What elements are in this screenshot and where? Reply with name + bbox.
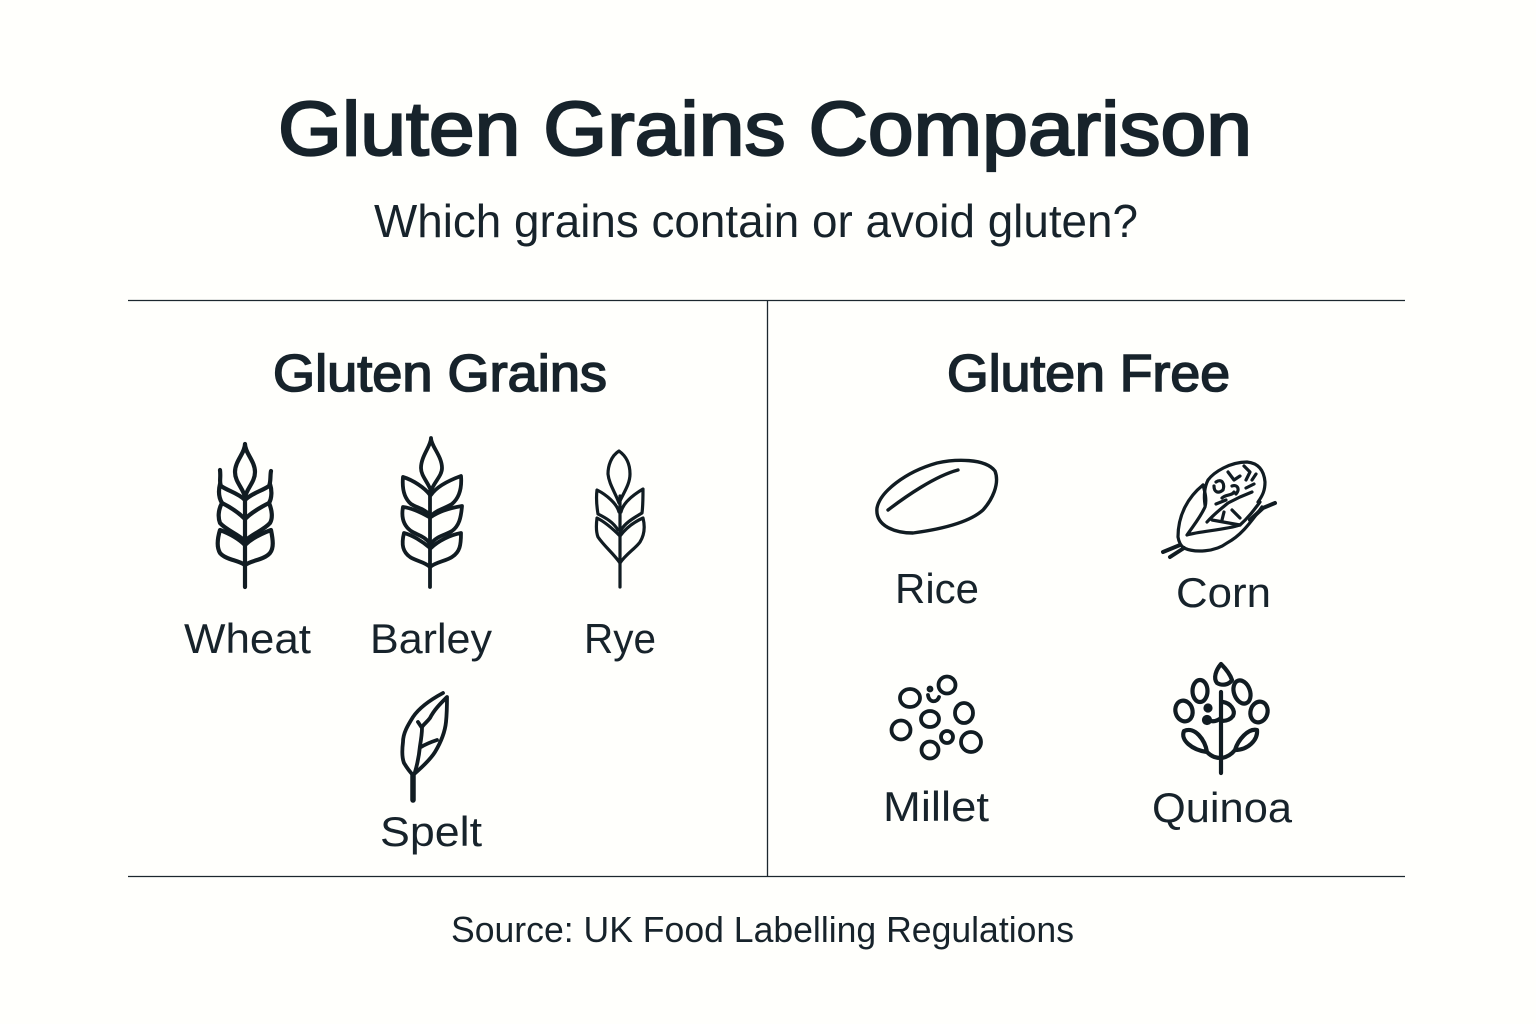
title: Gluten Grains Comparison (278, 87, 1252, 172)
panel: gluten grains (184, 345, 656, 855)
source note: Source: UK Food Labelling Regulations (451, 909, 1074, 950)
icon: rye (596, 451, 644, 587)
panel: gluten free (877, 345, 1293, 831)
icon: corn (1163, 462, 1275, 557)
label: wheat: Wheat (184, 615, 311, 662)
icon: barley (402, 438, 462, 587)
subtitle: Which grains contain or avoid gluten? (374, 195, 1138, 247)
label: millet: Millet (883, 783, 989, 830)
label: rice: Rice (895, 565, 979, 612)
heading: gluten free: Gluten Free (947, 345, 1230, 403)
icon: spelt (402, 693, 447, 800)
icon: rice (877, 460, 997, 533)
label: corn: Corn (1176, 569, 1271, 616)
label: rye: Rye (584, 615, 656, 662)
label: barley: Barley (370, 615, 492, 662)
icon: wheat (218, 444, 273, 587)
icon: quinoa (1173, 664, 1270, 773)
label: quinoa: Quinoa (1152, 784, 1293, 831)
heading: gluten grains: Gluten Grains (273, 345, 607, 403)
icon: millet (892, 676, 981, 758)
label: spelt: Spelt (380, 808, 482, 855)
